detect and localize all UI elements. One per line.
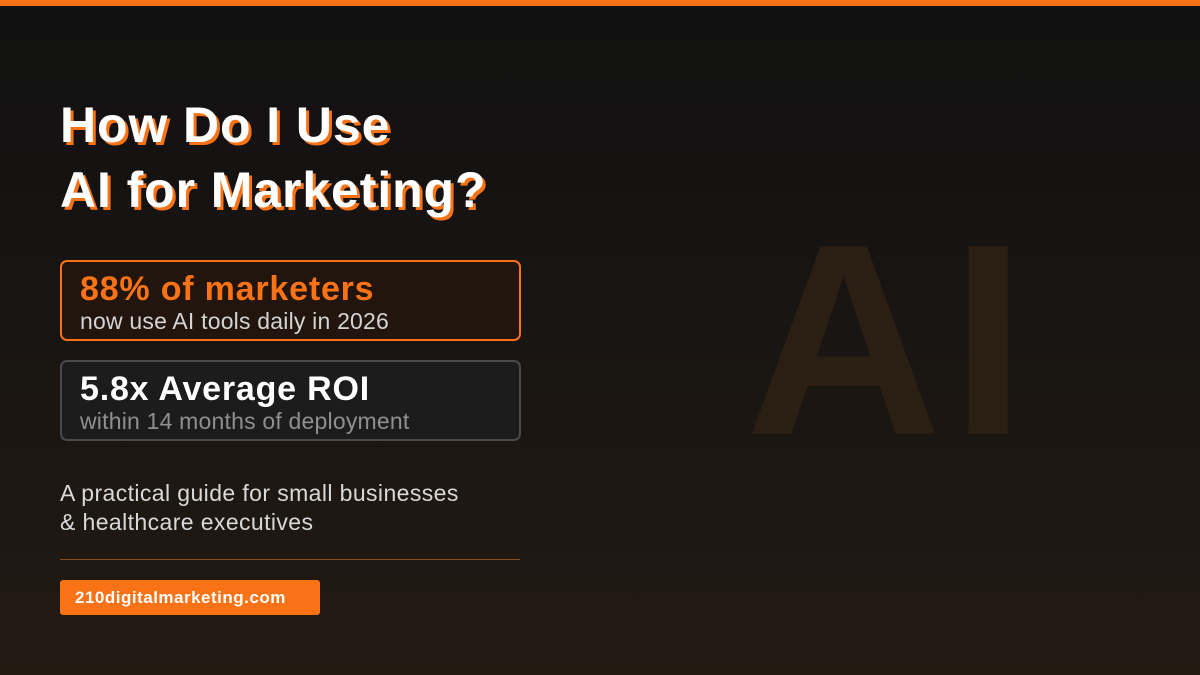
watermark: AI: AI: [745, 187, 1034, 492]
stat subtext: now use AI tools daily in 2026: [80, 308, 389, 334]
stat card: 88% of marketers: [60, 260, 521, 341]
top accent bar: [0, 0, 1200, 6]
stat headline: 88% of marketers: [80, 270, 374, 308]
url badge: 210digitalmarketing.com: [75, 588, 286, 607]
subtitle: A practical guide for small businesses: [60, 480, 459, 506]
divider: [60, 559, 520, 560]
title: How Do I Use: [60, 97, 390, 153]
title: AI for Marketing?: [60, 162, 486, 218]
title: [60, 97, 486, 220]
subtitle: & healthcare executives: [60, 509, 313, 535]
url badge: [60, 580, 320, 615]
stat subtext: within 14 months of deployment: [80, 408, 409, 434]
subtitle: [60, 480, 459, 535]
stat card: ROI: [60, 360, 521, 441]
stat headline: 5.8x Average ROI: [80, 370, 370, 408]
